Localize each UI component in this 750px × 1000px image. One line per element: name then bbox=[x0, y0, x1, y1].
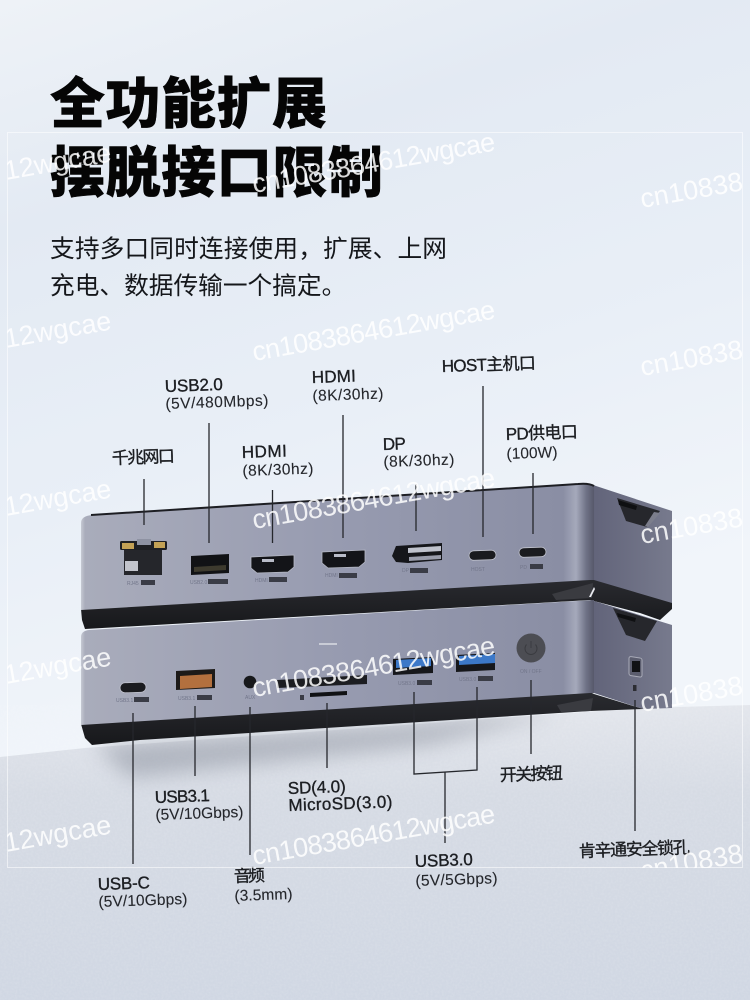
upper dock bbox=[81, 484, 672, 629]
upper dock top edge bbox=[91, 484, 594, 515]
label: Kensington lock: 肯辛通安全锁孔 bbox=[578, 838, 690, 861]
title: 摆脱接口限制 bbox=[50, 142, 383, 204]
power button: ON / OFF bbox=[520, 669, 542, 675]
port: USB2.0 bbox=[190, 554, 229, 586]
callout lines lower bbox=[133, 680, 635, 864]
label: audio: (3.5mm) bbox=[234, 886, 293, 905]
port: card slots bbox=[277, 675, 367, 700]
watermarks: cn1083864612wgcae bbox=[250, 295, 497, 367]
port: USB2.0: USB2.0 bbox=[190, 580, 207, 586]
label: DP bbox=[382, 433, 455, 471]
watermarks bbox=[2, 127, 745, 886]
label: USB3.1: (5V/10Gbps) bbox=[155, 804, 244, 824]
port: DisplayPort bbox=[392, 543, 442, 574]
watermarks: cn10838 bbox=[638, 166, 745, 214]
power button bbox=[516, 634, 546, 675]
label: SD: SD(4.0) bbox=[287, 777, 346, 798]
label: USB2.0: USB2.0 bbox=[165, 375, 223, 396]
port: USB3.0 right: USB3.0 bbox=[459, 677, 476, 683]
watermarks: 12wgcae bbox=[2, 810, 113, 858]
watermarks: cn10838 bbox=[638, 502, 745, 550]
label: USB2.0: (5V/480Mbps) bbox=[165, 392, 269, 413]
label: audio: 音频 bbox=[233, 866, 265, 886]
label: HDMI 2: HDMI bbox=[311, 366, 356, 387]
upper dock side face bbox=[593, 485, 672, 604]
upper dock side vent bbox=[617, 498, 660, 527]
label: HDMI 2: (8K/30hz) bbox=[312, 386, 384, 405]
watermarks: cn10838 bbox=[638, 334, 745, 382]
label: audio bbox=[233, 865, 293, 905]
watermarks: cn1083864612wgcae bbox=[250, 799, 497, 871]
title bbox=[50, 73, 383, 204]
label: HOST: HOST主机口 bbox=[441, 354, 536, 376]
label: PD: PD供电口 bbox=[505, 422, 578, 444]
port: USB3.1 orange: USB3.1 bbox=[178, 696, 195, 702]
lower dock front face bbox=[81, 600, 594, 725]
watermarks: 12wgcae bbox=[2, 642, 113, 690]
upper dock foot detail bbox=[552, 583, 595, 600]
port: audio jack bbox=[244, 676, 256, 701]
port: HOST: HOST bbox=[471, 567, 485, 573]
port: DisplayPort: DP bbox=[402, 568, 410, 574]
watermarks: cn1083864612wgcae bbox=[250, 463, 497, 535]
label: USB3.1: USB3.1 bbox=[154, 786, 210, 807]
label: USB3.0 bbox=[414, 849, 498, 890]
watermarks: 12wgcae bbox=[2, 474, 113, 522]
lower dock bbox=[81, 600, 672, 745]
label: gigabit LAN: 千兆网口 bbox=[111, 447, 175, 468]
watermarks: cn1083864612wgcae bbox=[250, 631, 497, 703]
label: USB-C bbox=[97, 872, 188, 911]
watermarks: cn10838 bbox=[638, 670, 745, 718]
port: PD bbox=[519, 547, 546, 571]
label: power button: 开关按钮 bbox=[499, 764, 563, 785]
label: USB3.0: USB3.0 bbox=[414, 850, 473, 871]
port: HOST bbox=[469, 550, 496, 573]
lower dock underside bbox=[81, 692, 643, 745]
LED indicator bbox=[319, 643, 337, 645]
label: HDMI 2 bbox=[311, 366, 384, 405]
port: PD: PD bbox=[520, 565, 527, 571]
port: USB3.0 right bbox=[456, 653, 495, 683]
port: USB3.0 left bbox=[393, 657, 433, 687]
lower dock foot detail bbox=[557, 698, 593, 712]
port: HDMI 2: HDMI bbox=[325, 573, 338, 579]
label: USB-C: (5V/10Gbps) bbox=[98, 891, 188, 911]
label: HDMI 1: (8K/30hz) bbox=[242, 461, 314, 480]
upper dock underside bbox=[81, 578, 672, 629]
label: PD bbox=[505, 422, 579, 463]
port: HDMI 1: HDMI bbox=[255, 578, 268, 584]
label: HDMI 1 bbox=[241, 441, 314, 480]
wall surface bbox=[0, 705, 750, 1000]
port: RJ45 bbox=[120, 539, 167, 587]
label: USB3.1 bbox=[154, 785, 244, 824]
label: USB2.0 bbox=[165, 373, 269, 413]
watermark frame bbox=[8, 132, 742, 868]
description: 充电、数据传输一个搞定。 bbox=[50, 272, 346, 300]
label: PD: (100W) bbox=[506, 444, 558, 463]
port: HDMI 1 bbox=[251, 555, 294, 584]
port: HDMI 2 bbox=[322, 550, 365, 579]
port: USB3.0 left: USB3.0 bbox=[398, 681, 415, 687]
description bbox=[50, 235, 447, 300]
title: 全功能扩展 bbox=[50, 73, 327, 135]
watermarks: 12wgcae bbox=[2, 306, 113, 354]
port: USB-C bbox=[116, 682, 149, 704]
port: RJ45: RJ45 bbox=[127, 581, 139, 587]
watermarks: cn1083864612wgcae bbox=[250, 127, 497, 199]
Kensington lock bbox=[629, 656, 642, 691]
watermarks: cn10838 bbox=[638, 838, 745, 886]
callout lines upper bbox=[144, 386, 533, 543]
label: USB3.0: (5V/5Gbps) bbox=[415, 870, 498, 890]
upper dock front face bbox=[81, 484, 594, 610]
label: USB-C: USB-C bbox=[97, 873, 150, 894]
label: HDMI 1: HDMI bbox=[241, 441, 287, 462]
port: USB3.1 orange bbox=[176, 669, 215, 702]
port: USB-C: USB3.1 bbox=[116, 698, 133, 704]
label: SD bbox=[287, 775, 393, 815]
port: audio jack: AUX bbox=[245, 695, 256, 701]
description: 支持多口同时连接使用，扩展、上网 bbox=[50, 235, 447, 263]
label: DP: DP bbox=[382, 434, 406, 454]
label: SD: MicroSD(3.0) bbox=[288, 792, 393, 815]
label: DP: (8K/30hz) bbox=[383, 452, 455, 471]
watermarks: 12wgcae bbox=[2, 138, 113, 186]
lower dock side vent bbox=[613, 608, 657, 641]
lower dock side face bbox=[594, 601, 672, 709]
